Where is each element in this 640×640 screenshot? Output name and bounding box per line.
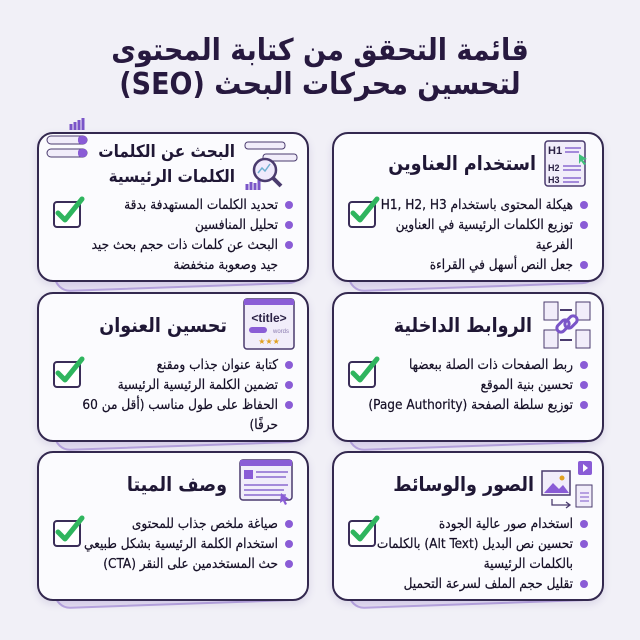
- icon: H1 H2 H3: H3: [548, 175, 560, 185]
- bullets: صياغة ملخص جذاب للمحتوى: [132, 516, 278, 532]
- bullets: [82, 357, 293, 433]
- checkbox: [53, 356, 84, 388]
- bullets: تقليل حجم الملف لسرعة التحميل: [404, 576, 573, 592]
- bullets: [92, 197, 293, 273]
- icon: image media: [541, 461, 592, 508]
- title: [111, 33, 529, 102]
- panel: title optimization: [37, 292, 309, 442]
- panel: meta description: [37, 451, 309, 601]
- bullets: تحليل المنافسين: [195, 217, 278, 233]
- panel: internal links: [332, 292, 604, 442]
- checkbox: [348, 356, 380, 388]
- bullets: توزيع سلطة الصفحة (Page Authority): [368, 397, 573, 413]
- heading: الكلمات الرئيسية: [109, 167, 235, 187]
- bullets: البحث عن كلمات ذات حجم بحث جيد جيد وصعوبة منخفضة: [92, 237, 278, 273]
- icon: title tag: [243, 298, 295, 350]
- bullets: تحسين نص البديل (Alt Text) بالكلمات بالكلمات الرئيسية: [377, 536, 573, 572]
- bullets: الحفاظ على طول مناسب (أقل من 60 حرفًا): [82, 397, 278, 433]
- icon: H1 H2 H3: H2: [548, 163, 560, 173]
- bullets: هيكلة المحتوى باستخدام H1, H2, H3: [381, 197, 573, 213]
- bullets: [84, 516, 293, 572]
- bullets: جعل النص أسهل في القراءة: [430, 257, 573, 273]
- bullets: [368, 357, 588, 413]
- bullets: استخدام صور عالية الجودة: [439, 516, 573, 532]
- bullets: تضمين الكلمة الرئيسية الرئيسية: [118, 377, 278, 393]
- bullets: تحديد الكلمات المستهدفة بدقة: [124, 197, 278, 213]
- icon: chain links: [544, 302, 590, 348]
- panel: headings: [332, 132, 604, 282]
- icon: title tag: words: [272, 329, 289, 335]
- bullets: [377, 516, 588, 592]
- icon: H1 H2 H3: H1: [548, 145, 562, 157]
- icon: magnifier chart: [244, 142, 298, 190]
- bullets: حث المستخدمين على النقر (CTA): [103, 556, 278, 572]
- icon: title tag: ★★★: [258, 337, 280, 346]
- bullets: استخدام الكلمة الرئيسية بشكل طبيعي: [84, 536, 278, 552]
- checkbox: [348, 516, 380, 547]
- heading: استخدام العناوين: [388, 152, 536, 175]
- icon: title tag: <title>: [251, 311, 287, 325]
- heading: وصف الميتا: [127, 473, 227, 496]
- checkbox: [53, 196, 84, 228]
- heading: الصور والوسائط: [393, 473, 534, 496]
- bullets: تحسين بنية الموقع: [480, 377, 573, 393]
- bullets: كتابة عنوان جذاب ومقنع: [157, 357, 278, 373]
- bullets: [381, 197, 588, 273]
- checkbox: [348, 196, 380, 228]
- bullets: ربط الصفحات ذات الصلة ببعضها: [409, 357, 573, 373]
- title: قائمة التحقق من كتابة المحتوى: [111, 33, 529, 68]
- heading: تحسين العنوان: [99, 314, 227, 337]
- checkbox: [53, 516, 84, 547]
- title: لتحسين محركات البحث (SEO): [119, 67, 521, 102]
- heading: [98, 142, 235, 187]
- panel: keyword research: [37, 132, 309, 282]
- icon: browser snippet: [239, 459, 293, 505]
- panel: images and media: [332, 451, 604, 601]
- bullets: توزيع الكلمات الرئيسية في العناوين الفرعية: [396, 217, 573, 253]
- heading: الروابط الداخلية: [394, 314, 532, 337]
- icon: H1 H2 H3: [544, 140, 587, 187]
- icon: search bars: [46, 118, 88, 158]
- heading: البحث عن الكلمات: [98, 142, 235, 162]
